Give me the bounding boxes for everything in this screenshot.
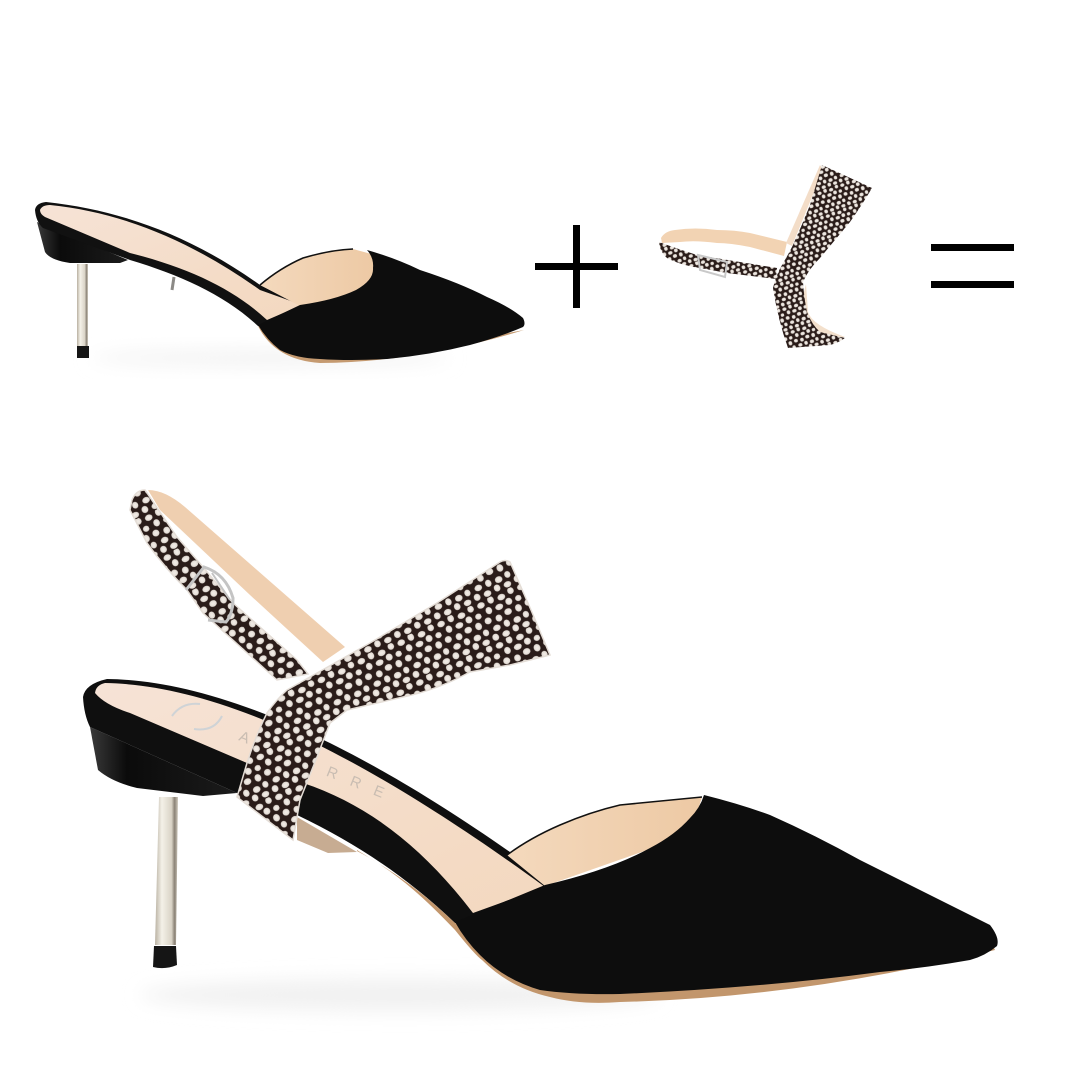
insole logo [172,704,222,729]
insole brand text: ALTERRE [237,728,387,802]
floor shadow [140,979,660,1011]
heel wedge [90,727,237,796]
sole edge [357,850,995,1003]
suede vamp [455,795,998,994]
strap underside detail [297,817,357,853]
speckled ankle strap [237,560,550,840]
black shoe body [83,679,550,930]
assembled slingback shoe [83,490,998,1011]
heel strap lining [148,490,345,662]
speckled heel strap [130,490,308,680]
stiletto heel [153,797,178,968]
buckle [186,567,233,622]
inner lining [507,797,702,886]
detachable strap [659,165,872,348]
plus sign [535,225,618,308]
insole [95,683,545,913]
equals sign [931,244,1014,288]
mule shoe [35,202,524,365]
